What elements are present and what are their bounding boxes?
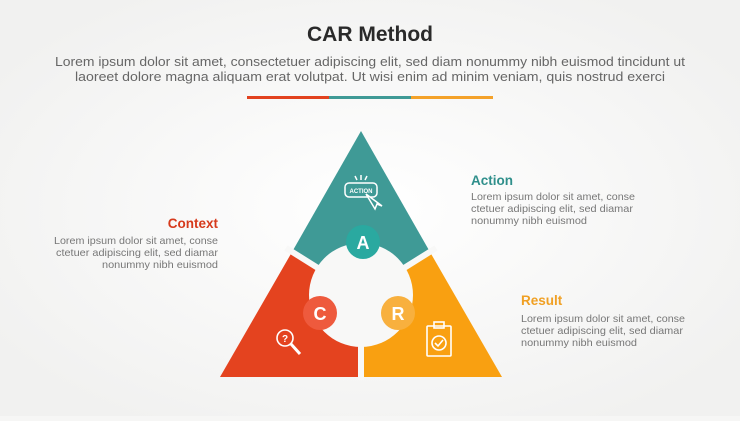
text block: result [521, 293, 685, 349]
badge C [303, 296, 337, 330]
segment: action (teal) [292, 131, 430, 295]
text block: context: nonummy nibh euismod [102, 259, 218, 271]
icon: magnifier question [277, 330, 300, 354]
text block: context: Context [168, 216, 219, 231]
text block: action: Action [471, 173, 513, 188]
badge A: A [356, 233, 370, 253]
text block: action [471, 173, 635, 227]
text block: result: ctetuer adipiscing elit, sed diamar [521, 325, 684, 337]
text block: action: Lorem ipsum dolor sit amet, conse [471, 191, 635, 203]
triangle diagram [220, 131, 502, 380]
badge R: R [392, 304, 404, 324]
text block: action: nonummy nibh euismod [471, 215, 587, 227]
segment: context (red) [220, 252, 361, 377]
text block: context: ctetuer adipiscing elit, sed diamar [56, 247, 219, 259]
text block: result: nonummy nibh euismod [521, 337, 637, 349]
text block: context: Lorem ipsum dolor sit amet, conse [54, 235, 218, 247]
badge R [381, 296, 415, 330]
color bar divider [247, 96, 493, 99]
icon: action button: ACTION [350, 189, 372, 195]
subtitle text: laoreet dolore magna aliquam erat volutpat. Ut wisi enim ad minim veniam, quis nostrud exerci [75, 69, 665, 84]
segment: result (orange) [361, 252, 502, 377]
text block: action: ctetuer adipiscing elit, sed diamar [471, 203, 634, 215]
title: CAR Method [307, 23, 433, 46]
text block: result: Lorem ipsum dolor sit amet, conse [521, 313, 685, 325]
icon: clipboard check [427, 322, 451, 356]
icon: action button [345, 175, 382, 209]
text block: result: Result [521, 293, 563, 308]
subtitle text: Lorem ipsum dolor sit amet, consectetuer adipiscing elit, sed diam nonummy nibh euismod tincidunt ut [55, 54, 685, 69]
icon: magnifier question: ? [282, 334, 288, 345]
badge A [346, 225, 380, 259]
text block: context [54, 216, 219, 271]
subtitle text [55, 54, 685, 84]
badge C: C [314, 304, 326, 324]
